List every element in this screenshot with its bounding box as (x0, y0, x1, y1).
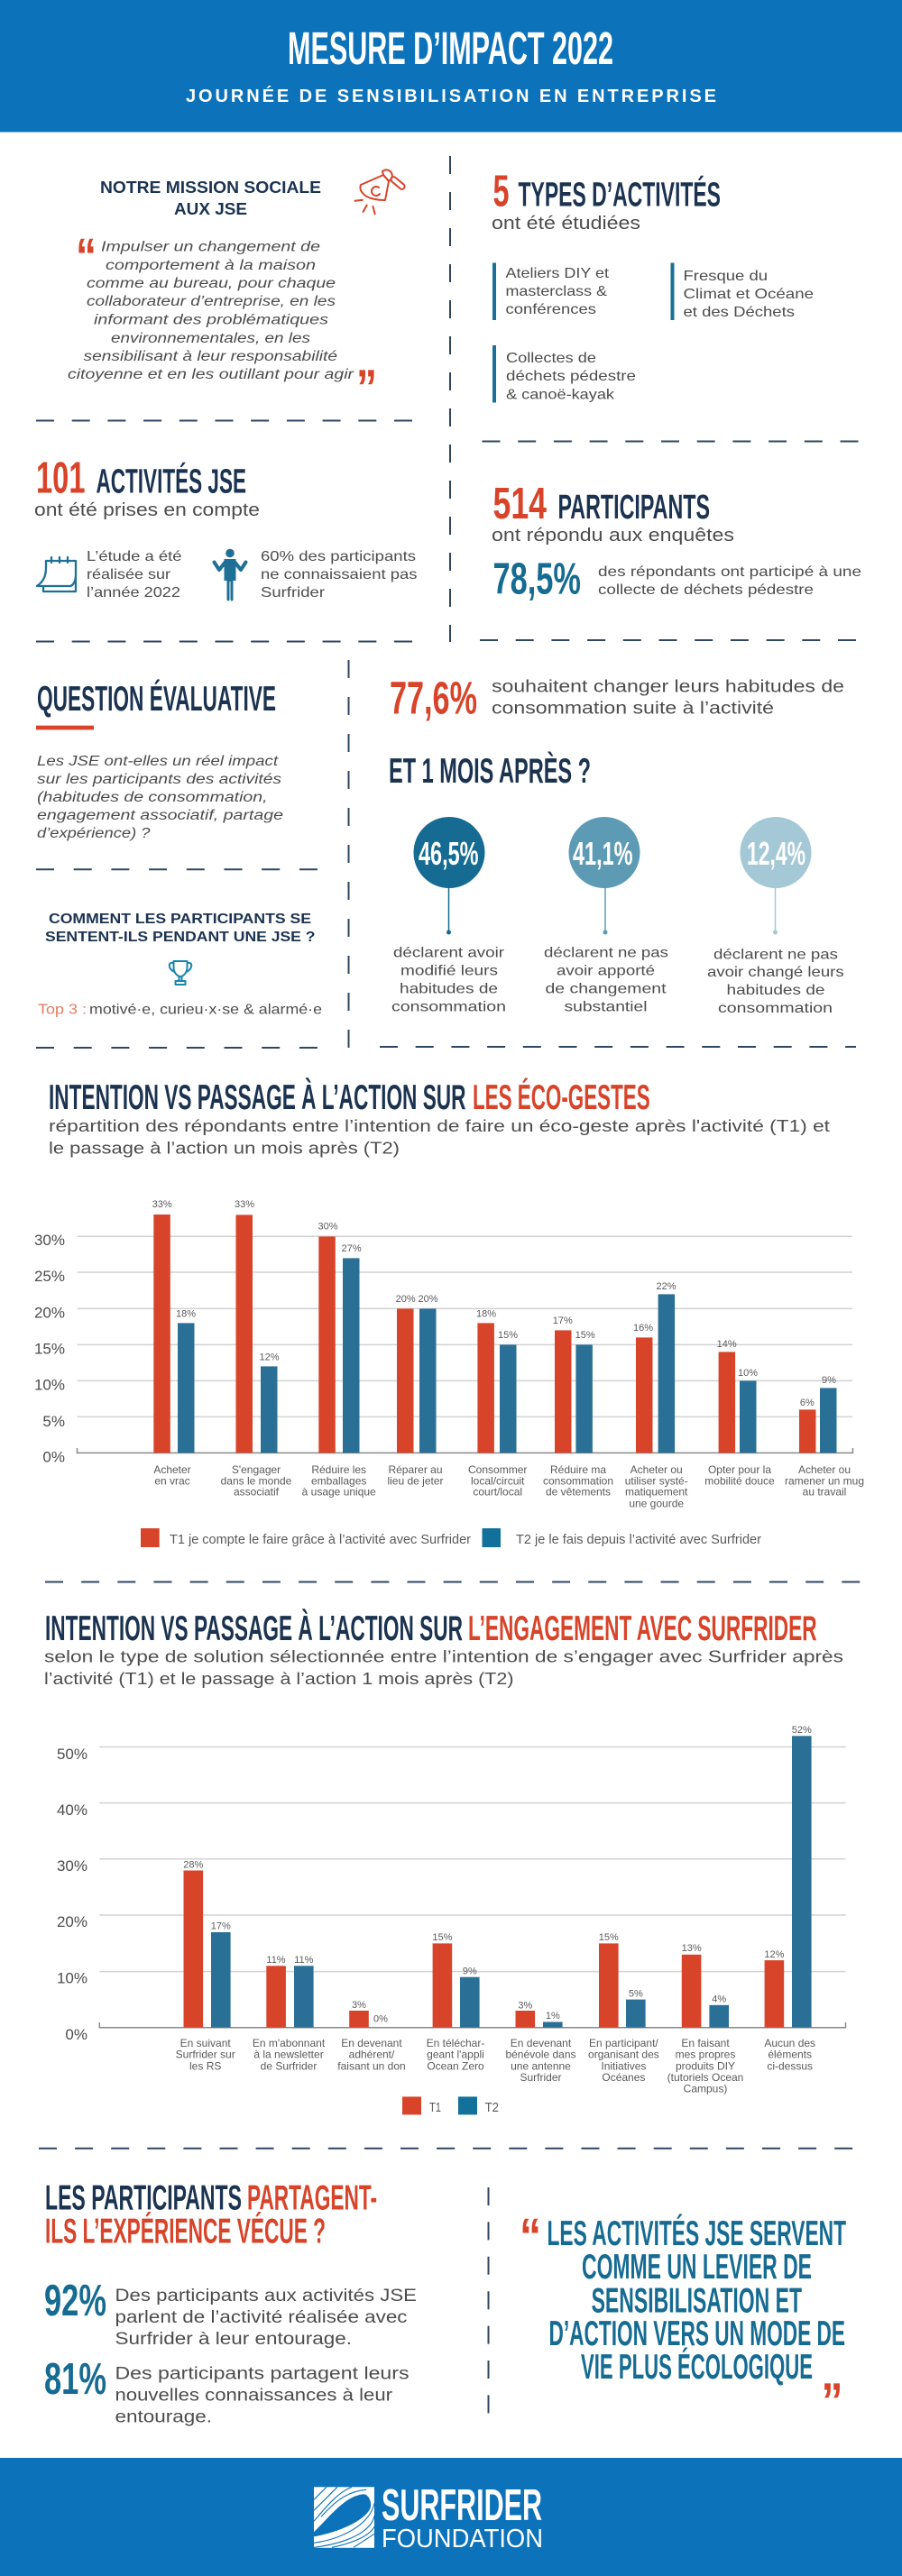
y axis labels: 30% (57, 1857, 87, 1875)
heading: éco-gestes: INTENTION VS PASSAGE À L’ACTION SUR (49, 1077, 465, 1117)
value labels: 9% (822, 1375, 836, 1386)
study period text: réalisée sur (87, 567, 171, 582)
stat: 81% (44, 2355, 410, 2427)
heading: partage: LES PARTICIPANTS (45, 2179, 242, 2218)
subtitle: JOURNÉE DE SENSIBILISATION EN ENTREPRISE (186, 86, 716, 106)
study period text: l’année 2022 (87, 585, 180, 600)
category labels: geant l'appli (427, 2049, 484, 2061)
category labels: Acheter (153, 1463, 191, 1476)
value labels: 1% (546, 2011, 560, 2021)
header banner (0, 0, 902, 132)
category labels: En faisant (681, 2037, 730, 2049)
T2 bars (211, 1736, 812, 2028)
category labels: associatif (234, 1486, 280, 1499)
category labels: une gourde (629, 1497, 684, 1509)
T1 bars (153, 1215, 816, 1453)
text: 41,1% (544, 946, 668, 1015)
stat: 92% (44, 2277, 417, 2349)
text: 41,1%: déclarent ne pas (544, 946, 668, 961)
heading: 514 participants: 514 (492, 480, 547, 528)
stat: 92%: parlent de l’activité réalisée avec (115, 2308, 408, 2327)
value labels: 17% (553, 1316, 573, 1326)
description: éco-gestes: répartition des répondants entre l’intention de faire un éco-geste après l'activité (T1) et (49, 1116, 830, 1135)
feelings heading: SENTENT-ILS PENDANT UNE JSE ? (45, 930, 316, 945)
stat: 92%: Surfrider à leur entourage. (115, 2330, 352, 2349)
panel: conclusion quote: ” (821, 2372, 842, 2429)
panel: éco-gestes (34, 1077, 864, 1547)
category labels: mes propres (676, 2049, 735, 2061)
category labels: En devenant (511, 2037, 572, 2049)
activity: ateliers: masterclass & (505, 284, 607, 299)
category labels: à la newsletter (253, 2049, 324, 2061)
y axis labels: 10% (34, 1376, 65, 1394)
category labels: (tutoriels Ocean (667, 2071, 743, 2084)
heading: 5 types: 5 (492, 168, 509, 216)
mission quote: comme au bureau, pour chaque (87, 276, 336, 291)
bar chart: éco-gestes (34, 1199, 864, 1509)
activity: ateliers: Ateliers DIY et (505, 266, 610, 281)
category labels: une antenne (511, 2059, 571, 2072)
heading: 5 types: ont été étudiées (492, 214, 640, 234)
category labels: organisant des (588, 2049, 659, 2061)
value labels (152, 1199, 836, 1408)
category labels (153, 1463, 864, 1509)
surfrider awareness text: 60% des participants (261, 549, 416, 564)
legend: engagement (402, 2096, 499, 2115)
icon: calendar (37, 557, 76, 591)
category labels: ci-dessus (767, 2059, 813, 2072)
category labels: Consommer (468, 1463, 527, 1476)
category labels: matiquement (625, 1486, 688, 1499)
text: 46,5%: déclarent avoir (393, 946, 505, 961)
category labels: En suivant (180, 2037, 231, 2049)
value labels: 11% (266, 1955, 286, 1966)
category labels: Réparer au (388, 1463, 443, 1476)
category labels: S'engager (232, 1463, 281, 1476)
text: 12,4%: déclarent ne pas (713, 947, 838, 962)
circle: 12,4% (740, 817, 812, 934)
value labels: 0% (373, 2014, 388, 2025)
question text (37, 754, 283, 841)
activity: fresque: Fresque du (684, 269, 768, 284)
mission heading (100, 179, 321, 218)
panel: 101 activités (34, 454, 417, 600)
category labels (176, 2037, 815, 2095)
value labels: 15% (432, 1932, 453, 1943)
study period text: L’étude a été (87, 549, 182, 564)
title: MESURE D’IMPACT 2022 (288, 23, 613, 74)
footer banner (0, 2458, 902, 2576)
category labels: Surfrider sur (176, 2049, 235, 2061)
legend: engagement: T1 (429, 2100, 441, 2115)
mission quote: citoyenne et en les outillant pour agir (68, 367, 354, 382)
category labels: bénévole dans (505, 2049, 576, 2061)
text: 46,5%: modifié leurs (400, 964, 498, 979)
heading: et 1 mois après: ET 1 MOIS APRÈS ? (389, 751, 591, 791)
value labels: 11% (294, 1955, 314, 1966)
y axis labels: 40% (57, 1801, 87, 1819)
question text: engagement associatif, partage (37, 808, 283, 823)
category labels: En devenant (341, 2037, 402, 2049)
mission heading: AUX JSE (174, 200, 247, 218)
heading: 101 activités: 101 (36, 454, 85, 503)
circle: 46,5%: 46,5% (419, 835, 478, 872)
heading: partage: PARTAGENT- (247, 2179, 377, 2218)
logo: wave mark (314, 2487, 374, 2548)
category labels: de vêtements (546, 1486, 611, 1499)
y axis labels: 20% (57, 1913, 87, 1930)
panel: 5 types d'activités (492, 168, 814, 402)
value labels: 15% (599, 1932, 619, 1943)
category labels: Aucun des (764, 2037, 815, 2049)
panel: partage de l'expérience (44, 2179, 417, 2427)
category labels: ramener un mug (785, 1475, 864, 1488)
value labels: 30% (318, 1221, 338, 1232)
value labels: 20% (396, 1294, 416, 1305)
T1 bars (184, 1870, 784, 2028)
panel: conclusion quote (520, 2207, 846, 2429)
category labels: mobilité douce (704, 1475, 775, 1488)
description: éco-gestes: le passage à l’action un mois après (T2) (49, 1138, 400, 1158)
stat: 92%: Des participants aux activités JSE (115, 2287, 417, 2306)
panel: et 1 mois après (389, 751, 844, 1016)
accent bar (36, 726, 94, 729)
y axis labels: 20% (34, 1304, 65, 1322)
category labels: Réduire ma (550, 1463, 606, 1476)
category labels: adhérent/ (349, 2049, 395, 2061)
question text: d’expérience) ? (37, 826, 151, 841)
y axis labels: 0% (65, 2026, 87, 2043)
stat: 81%: 81% (44, 2355, 106, 2404)
panel: mission sociale (68, 170, 406, 416)
intention text: souhaitent changer leurs habitudes de (492, 678, 844, 697)
heading: 5 types: TYPES D’ACTIVITÉS (518, 175, 721, 215)
value labels: 9% (463, 1966, 477, 1976)
heading: question évaluative: QUESTION ÉVALUATIVE (37, 679, 276, 719)
category labels: local/circuit (471, 1475, 525, 1488)
value labels: 12% (259, 1352, 280, 1363)
panel: 514 participants (492, 480, 861, 604)
surfrider awareness text: ne connaissaient pas (261, 567, 417, 582)
question text: sur les participants des activités (37, 772, 281, 787)
question text: (habitudes de consommation, (37, 790, 267, 805)
logo: wordmark (382, 2481, 543, 2553)
value labels: 13% (682, 1943, 702, 1954)
value labels: 16% (633, 1323, 653, 1334)
text: 12,4%: avoir changé leurs (707, 965, 844, 980)
category labels: Acheter ou (630, 1463, 683, 1476)
value labels: 12% (764, 1949, 785, 1960)
mission quote: comportement à la maison (106, 258, 316, 273)
intention text: consommation suite à l’activité (492, 700, 774, 719)
y axis labels: 25% (34, 1268, 65, 1285)
description: engagement: selon le type de solution sélectionnée entre l’intention de s’engager avec Surfrider après (44, 1646, 843, 1665)
category labels: éléments (768, 2049, 812, 2061)
intention text (492, 678, 844, 719)
value labels: 10% (738, 1368, 758, 1379)
text: 12,4%: consommation (718, 1001, 833, 1016)
icon: person (215, 549, 245, 600)
category labels: Initiatives (601, 2059, 646, 2072)
question text: Les JSE ont-elles un réel impact (37, 754, 279, 769)
y axis labels: 15% (34, 1340, 65, 1358)
stat: 81%: Des participants partagent leurs (115, 2365, 410, 2384)
circle: 12,4%: 12,4% (747, 835, 805, 872)
activity: fresque: Climat et Océane (684, 287, 814, 302)
mission quote: “ (76, 227, 97, 284)
category labels: consommation (543, 1475, 613, 1488)
heading: partage: ILS L’EXPÉRIENCE VÉCUE ? (45, 2212, 326, 2251)
surfrider awareness text (261, 549, 417, 600)
top 3 feelings: motivé·e, curieu·x·se & alarmé·e (89, 1003, 322, 1018)
text: 46,5%: habitudes de (400, 982, 498, 997)
text: 12,4%: habitudes de (727, 983, 825, 998)
value labels: 27% (342, 1243, 362, 1254)
panel: 77,6% intention (390, 673, 844, 724)
mission quote: informant des problématiques (94, 312, 328, 328)
activity: collectes (492, 345, 636, 402)
mission quote: Impulser un changement de (101, 240, 320, 255)
value labels: 22% (656, 1281, 676, 1292)
text: 41,1%: de changement (545, 982, 667, 997)
legend: éco-gestes: T2 je le fais depuis l’activité avec Surfrider (516, 1532, 761, 1547)
value labels: 52% (792, 1725, 812, 1736)
category labels: Opter pour la (708, 1463, 771, 1476)
y axis labels: 50% (57, 1746, 87, 1763)
category labels: utiliser systé- (625, 1475, 688, 1488)
category labels: emballages (311, 1475, 366, 1488)
category labels: dans le monde (221, 1475, 292, 1488)
stat: 78,5%: 78,5% (492, 555, 581, 604)
value labels: 33% (235, 1199, 254, 1210)
stat: 81%: nouvelles connaissances à leur (115, 2387, 393, 2406)
value labels: 20% (418, 1294, 438, 1305)
category labels: Acheter ou (798, 1463, 851, 1476)
activity: collectes: & canoë-kayak (506, 388, 615, 402)
circle: 41,1%: 41,1% (573, 835, 633, 872)
category labels: En téléchar- (427, 2037, 484, 2049)
value labels (183, 1725, 812, 2025)
stat: 78,5% (492, 555, 861, 604)
category labels: en vrac (154, 1475, 190, 1488)
value labels: 28% (183, 1859, 204, 1870)
stat: 78,5%: des répondants ont participé à une (598, 564, 861, 580)
activity: collectes: Collectes de (506, 351, 596, 366)
description: engagement (44, 1646, 843, 1688)
logo: wordmark: FOUNDATION (382, 2525, 543, 2553)
study period text (87, 549, 182, 600)
legend: éco-gestes (141, 1528, 761, 1547)
icon: trophy (170, 961, 191, 985)
feelings heading: COMMENT LES PARTICIPANTS SE (49, 912, 311, 927)
category labels: produits DIY (676, 2059, 735, 2072)
activity: collectes: déchets pédestre (506, 369, 636, 384)
category labels: En m'abonnant (253, 2037, 326, 2049)
value labels: 17% (211, 1921, 231, 1932)
value labels: 5% (629, 1989, 643, 2000)
description: engagement: l’activité (T1) et le passage à l’action 1 mois après (T2) (44, 1669, 514, 1688)
stat: 77,6%: 77,6% (390, 673, 477, 724)
category labels: Réduire les (311, 1463, 366, 1476)
value labels: 3% (518, 2000, 532, 2011)
mission quote: ” (356, 359, 377, 416)
category labels: En participant/ (589, 2037, 658, 2049)
value labels: 6% (800, 1398, 815, 1408)
mission quote: collaborateur d’entreprise, en les (87, 294, 336, 309)
value labels: 18% (176, 1309, 196, 1320)
legend: éco-gestes: T1 je compte le faire grâce à l’activité avec Surfrider (170, 1532, 471, 1547)
category labels: les RS (189, 2059, 221, 2072)
description: éco-gestes (49, 1116, 830, 1158)
surfrider awareness text: Surfrider (261, 585, 326, 600)
icon: megaphone (355, 170, 406, 214)
heading: engagement: INTENTION VS PASSAGE À L’ACTION SUR (45, 1609, 463, 1648)
text: 46,5% (391, 946, 506, 1015)
circle: 46,5% (413, 817, 485, 934)
category labels: Surfrider (520, 2071, 562, 2084)
stat: 81%: entourage. (115, 2408, 212, 2427)
heading: 101 activités (34, 454, 260, 520)
circle: 41,1% (568, 817, 640, 934)
category labels: lieu de jeter (387, 1475, 444, 1488)
category labels: faisant un don (337, 2059, 406, 2072)
y axis labels: 5% (42, 1413, 65, 1430)
value labels: 4% (712, 1994, 726, 2005)
heading: 101 activités: ont été prises en compte (34, 500, 260, 520)
activity: fresque (671, 263, 814, 320)
heading: partage (45, 2179, 377, 2251)
text: 12,4% (707, 947, 844, 1016)
logo: wordmark: SURFRIDER (382, 2481, 542, 2530)
y axis labels: 10% (57, 1970, 87, 1987)
stat: 92%: 92% (44, 2277, 106, 2325)
panel: conclusion quote: “ (520, 2207, 541, 2264)
heading: 5 types (492, 168, 721, 234)
stat: 78,5%: collecte de déchets pédestre (598, 582, 814, 598)
mission quote: environnementales, en les (111, 331, 310, 346)
category labels: à usage unique (302, 1486, 376, 1499)
value labels: 3% (352, 2000, 366, 2011)
category labels: au travail (803, 1486, 846, 1499)
category labels: Océanes (602, 2071, 645, 2084)
text: 41,1%: avoir apporté (557, 964, 655, 979)
heading: 514 participants (492, 480, 734, 545)
panel: ressenti pendant une JSE (38, 912, 322, 1018)
text: 46,5%: consommation (391, 1000, 506, 1015)
T2 bars (178, 1258, 837, 1453)
value labels: 33% (152, 1199, 172, 1210)
heading: 514 participants: PARTICIPANTS (557, 489, 710, 527)
mission quote: sensibilisant à leur responsabilité (83, 349, 337, 364)
category labels: court/local (473, 1486, 522, 1499)
y axis labels (57, 1746, 87, 2043)
panel: question évaluative (36, 679, 283, 841)
y axis labels (34, 1232, 65, 1466)
heading: 101 activités: ACTIVITÉS JSE (96, 462, 246, 501)
feelings heading (45, 912, 316, 945)
activity: fresque: et des Déchets (684, 305, 795, 320)
value labels: 18% (476, 1309, 496, 1320)
activity: ateliers: conférences (505, 302, 596, 317)
heading: 514 participants: ont répondu aux enquêtes (492, 526, 734, 545)
activity: ateliers (492, 263, 610, 320)
value labels: 14% (717, 1339, 737, 1350)
mission quote (68, 227, 377, 416)
mission heading: NOTRE MISSION SOCIALE (100, 179, 321, 197)
top 3 feelings: Top 3 : (38, 1003, 87, 1018)
heading: éco-gestes: LES ÉCO-GESTES (473, 1077, 650, 1117)
bar chart: engagement (57, 1725, 846, 2095)
category labels: Campus) (684, 2083, 727, 2095)
text: 41,1%: substantiel (565, 1000, 648, 1015)
legend: engagement: T2 (485, 2100, 499, 2115)
category labels: Ocean Zero (427, 2059, 484, 2072)
y axis labels: 0% (42, 1449, 65, 1466)
panel: engagement avec Surfrider (44, 1609, 846, 2115)
category labels: de Surfrider (261, 2059, 317, 2072)
y axis labels: 30% (34, 1232, 65, 1249)
value labels: 15% (498, 1330, 518, 1341)
value labels: 15% (575, 1330, 595, 1341)
